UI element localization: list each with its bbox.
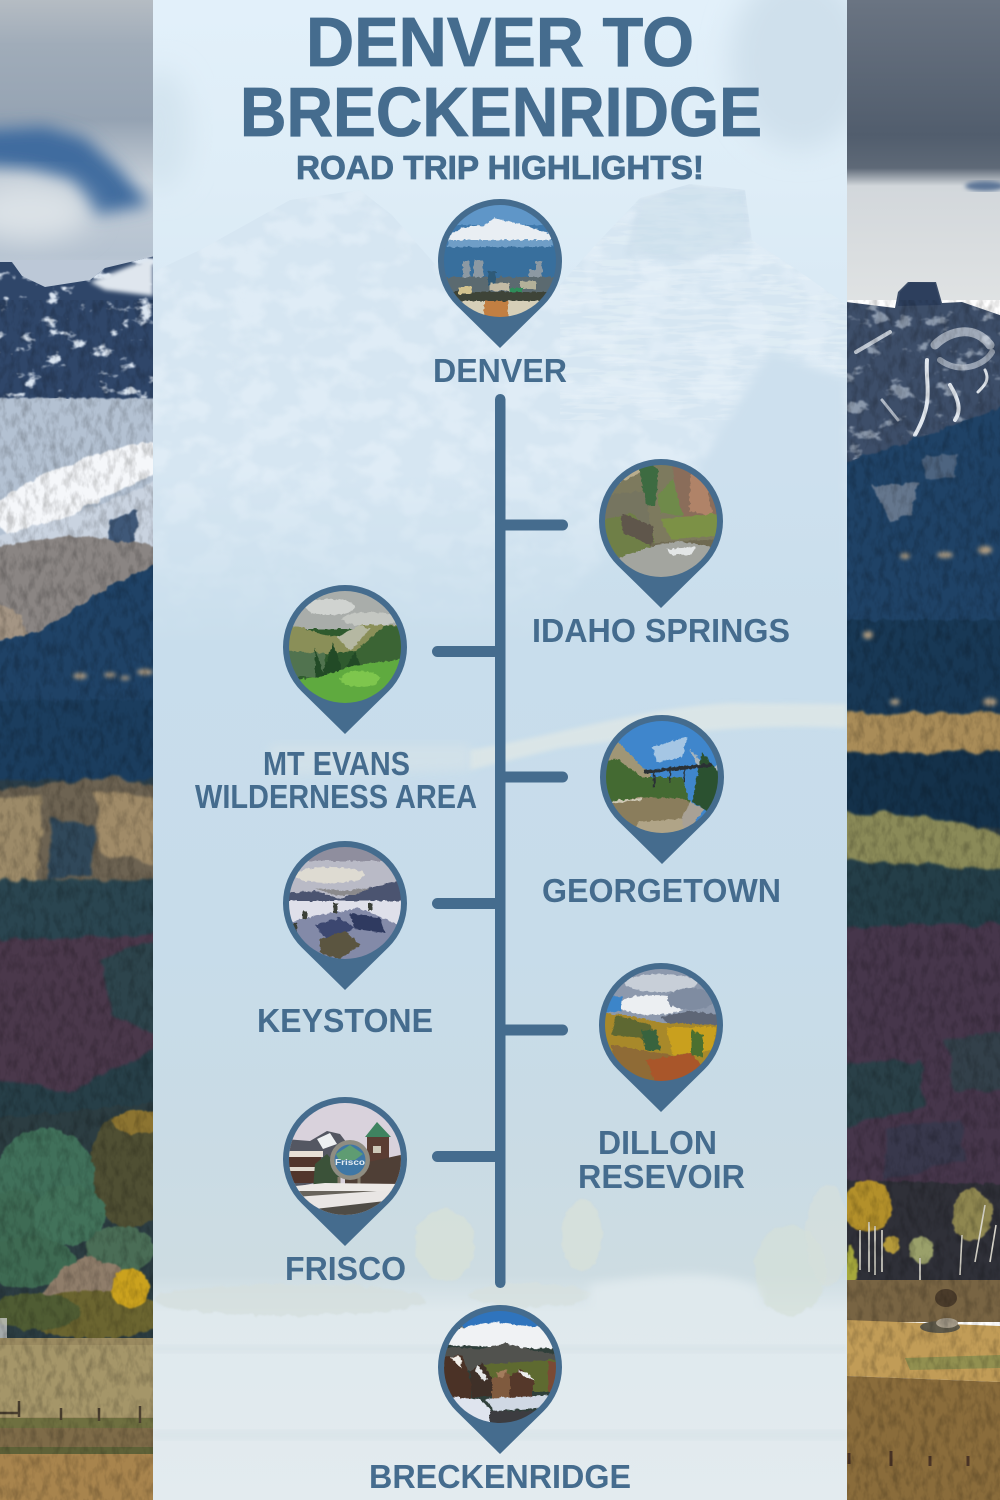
label: Frisco: FRISCO [285, 1250, 406, 1287]
right mountain [847, 282, 1000, 464]
photo grain [0, 300, 1000, 1500]
title [240, 3, 762, 186]
label: Georgetown: GEORGETOWN [542, 872, 781, 909]
label: Mt Evans Wilderness Area: MT EVANS [263, 745, 410, 782]
pin: Breckenridge [438, 1305, 562, 1454]
timeline spine and connectors [432, 394, 568, 1288]
pin: Dillon Reservoir [599, 963, 723, 1112]
field rock, shrub and fence [0, 1289, 968, 1466]
pin: Mt Evans Wilderness Area [283, 585, 407, 734]
left rock face [0, 256, 153, 642]
sky [0, 0, 1000, 300]
ghosted mountain peaks [154, 184, 846, 541]
label: Idaho Springs: IDAHO SPRINGS [532, 612, 790, 649]
ghosted field rise [594, 1274, 753, 1296]
label: Denver: DENVER [433, 352, 567, 389]
label: Dillon Reservoir [578, 1124, 745, 1195]
pin: Idaho Springs [599, 459, 723, 608]
translucent center panel [130, 0, 870, 1500]
meadow [0, 1280, 1000, 1500]
hillside bands [0, 712, 1000, 1200]
ghosted field strokes [153, 1345, 847, 1440]
label: Mt Evans Wilderness Area [195, 745, 477, 815]
ghosted aspen band [470, 703, 847, 770]
left snow slope [0, 398, 180, 642]
pin: Frisco: Frisco [335, 1158, 365, 1167]
label: Dillon Reservoir: RESEVOIR [578, 1158, 745, 1195]
trees, rock and bushes [0, 1100, 1000, 1345]
label: Mt Evans Wilderness Area: WILDERNESS AREA [195, 778, 477, 815]
title: BRECKENRIDGE [240, 73, 762, 151]
white aspen trunks [860, 1205, 996, 1280]
title: DENVER TO [306, 3, 694, 81]
label: Dillon Reservoir: DILLON [598, 1124, 717, 1161]
conifer forest [0, 400, 1000, 830]
pin: Keystone [283, 841, 407, 990]
pin: Georgetown [600, 715, 724, 864]
pin: Frisco [283, 1097, 407, 1246]
ghosted tree line [155, 1185, 850, 1316]
pin: Denver [438, 199, 562, 348]
label: Keystone: KEYSTONE [257, 1002, 433, 1039]
label: Breckenridge: BRECKENRIDGE [369, 1458, 631, 1495]
subtitle: ROAD TRIP HIGHLIGHTS! [296, 149, 704, 186]
aspen specks in forest [73, 546, 997, 730]
